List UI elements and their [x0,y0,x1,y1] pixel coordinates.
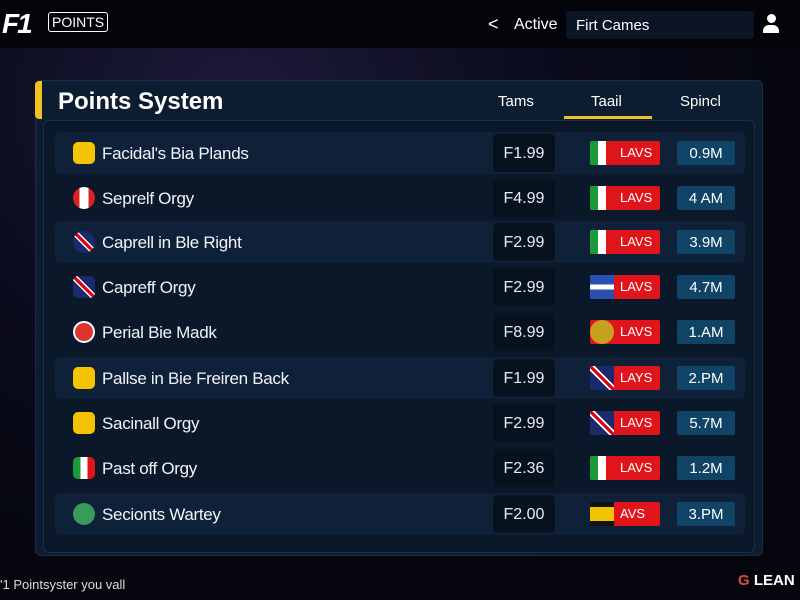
row 8: LAVS [620,460,652,475]
icon: user [763,14,779,33]
icon: share: < [488,14,499,34]
footer logo: G LEAN [738,572,795,589]
row 7: LAVS [620,415,652,430]
active label: Active [514,16,558,33]
row 4: F2.99 [504,279,544,296]
logo: POINTS [52,14,104,30]
row 9: F2.00 [504,506,544,523]
row 6: 2.PM [688,370,724,387]
row 9: 3.PM [688,506,724,523]
row 8: F2.36 [504,460,544,477]
row 9: Secionts Wartey [102,505,221,524]
row 1: F1.99 [504,145,544,162]
row 9 [55,493,745,535]
tabs: Tams [498,93,534,110]
row 6: LAYS [620,370,652,385]
row 6: Pallse in Bie Freiren Back [102,369,289,388]
row 5: F8.99 [504,324,544,341]
row 2: LAVS [620,190,652,205]
footer note: '1 Pointsyster you vall [0,577,125,592]
row 8 [73,449,735,487]
row 1: LAVS [620,145,652,160]
row 3: LAVS [620,234,652,249]
row 8: 1.2M [689,460,723,477]
row 7: F2.99 [504,415,544,432]
search box: Firt Cames [576,17,649,34]
row 4: 4.7M [689,279,723,296]
row 2: 4 AM [689,190,723,207]
row 5: LAVS [620,324,652,339]
row 1: 0.9M [689,145,723,162]
tabs: Taail [591,93,622,110]
logo [2,8,108,39]
row 3: Caprell in Ble Right [102,233,242,252]
row 2 [73,179,735,217]
accent bar [35,81,42,119]
row 1: Facidal's Bia Plands [102,144,249,163]
row 3: F2.99 [504,234,544,251]
row 4: Capreff Orgy [102,278,195,297]
header bar [0,0,800,48]
row 6: F1.99 [504,370,544,387]
row 5: 1.AM [688,324,724,341]
tabs [498,93,721,119]
row 3 [55,221,745,263]
table panel [43,120,755,553]
row 7: Sacinall Orgy [102,414,199,433]
search box [566,11,754,39]
row 1 [55,132,745,174]
row 9: AVS [620,506,645,521]
row 5: Perial Bie Madk [102,323,217,342]
row 7: 5.7M [689,415,723,432]
title: Points System [58,88,223,115]
logo: F1 [2,8,31,39]
row 7 [73,404,735,442]
row 6 [55,357,745,399]
row 4 [73,268,735,306]
row 8: Past off Orgy [102,459,197,478]
row 2: Seprelf Orgy [102,189,194,208]
row 4: LAVS [620,279,652,294]
row 3: 3.9M [689,234,723,251]
panel: points system [35,80,763,556]
tabs: Spincl [680,93,721,110]
row 5 [73,313,735,351]
row 2: F4.99 [504,190,544,207]
